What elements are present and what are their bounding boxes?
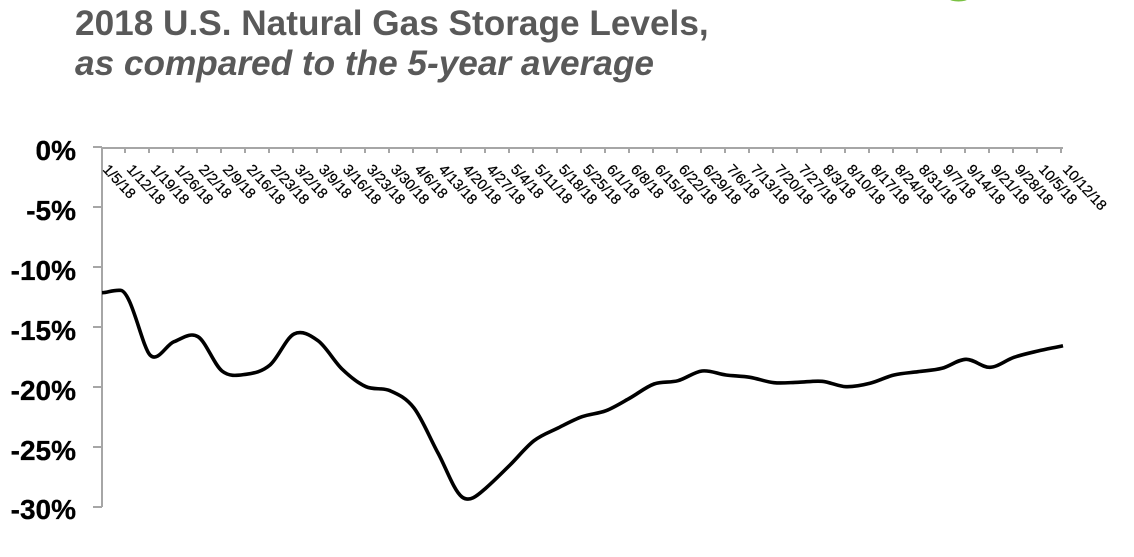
- y axis labels: [11, 135, 76, 525]
- x axis date labels: 1/12/18: [123, 162, 168, 208]
- x axis date labels: [99, 162, 1109, 214]
- x axis date labels: 3/30/18: [387, 162, 432, 208]
- title line 1: 2018 U.S. Natural Gas Storage Levels,: [75, 4, 709, 43]
- line chart: [11, 135, 1109, 525]
- x axis date labels: 4/27/18: [483, 162, 528, 208]
- x axis date labels: 1/26/18: [171, 162, 216, 208]
- x axis date labels: 2/16/18: [243, 162, 288, 208]
- x axis date labels: 8/24/18: [891, 162, 936, 208]
- x axis date labels: 7/13/18: [747, 162, 792, 208]
- x axis date labels: 8/3/18: [819, 162, 858, 202]
- x axis date labels: 1/19/18: [147, 162, 192, 208]
- x axis date labels: 3/23/18: [363, 162, 408, 208]
- x axis date labels: 6/29/18: [699, 162, 744, 208]
- x axis date labels: 3/9/18: [315, 162, 354, 202]
- x axis date labels: 4/20/18: [459, 162, 504, 208]
- x axis date labels: 6/8/18: [627, 162, 666, 202]
- y axis labels: -5%: [26, 195, 76, 226]
- x axis date labels: 3/16/18: [339, 162, 384, 208]
- x axis date labels: 1/5/18: [99, 162, 138, 202]
- x axis date labels: 4/13/18: [435, 162, 480, 208]
- y axis labels: -15%: [11, 315, 76, 346]
- y axis with ticks: [93, 147, 102, 507]
- x axis date labels: 8/10/18: [843, 162, 888, 208]
- x axis date labels: 5/25/18: [579, 162, 624, 208]
- y axis labels: -10%: [11, 255, 76, 286]
- x axis date labels: 5/4/18: [507, 162, 546, 202]
- y axis labels: -25%: [11, 435, 76, 466]
- x axis date labels: 7/27/18: [795, 162, 840, 208]
- x axis date labels: 2/9/18: [219, 162, 258, 202]
- x axis date labels: 2/2/18: [195, 162, 234, 202]
- title: [75, 4, 709, 83]
- title line 2: as compared to the 5-year average: [75, 44, 654, 83]
- x axis date labels: 3/2/18: [291, 162, 330, 202]
- storage level data line: [102, 290, 1063, 499]
- x axis date labels: 7/20/18: [771, 162, 816, 208]
- x axis date labels: 6/22/18: [675, 162, 720, 208]
- y axis labels: 0%: [36, 135, 76, 166]
- x axis date labels: 8/17/18: [867, 162, 912, 208]
- x axis date labels: 4/6/18: [411, 162, 450, 202]
- x axis date labels: 9/7/18: [939, 162, 978, 202]
- logo fragment: green arc at top edge: [950, 0, 968, 2]
- x axis date labels: 7/6/18: [723, 162, 762, 202]
- x axis date labels: 2/23/18: [267, 162, 312, 208]
- x axis date labels: 9/28/18: [1011, 162, 1056, 208]
- x axis date labels: 10/12/18: [1059, 162, 1109, 214]
- x axis date labels: 10/5/18: [1035, 162, 1080, 208]
- x axis date labels: 9/21/18: [987, 162, 1032, 208]
- y axis labels: -20%: [11, 375, 76, 406]
- x axis date labels: 6/1/18: [603, 162, 642, 202]
- x axis with ticks: [102, 148, 1063, 153]
- x axis date labels: 6/15/18: [651, 162, 696, 208]
- x axis date labels: 5/11/18: [531, 162, 575, 207]
- x axis date labels: 9/14/18: [963, 162, 1008, 208]
- y axis labels: -30%: [11, 494, 76, 525]
- x axis date labels: 8/31/18: [915, 162, 960, 208]
- x axis date labels: 5/18/18: [555, 162, 600, 208]
